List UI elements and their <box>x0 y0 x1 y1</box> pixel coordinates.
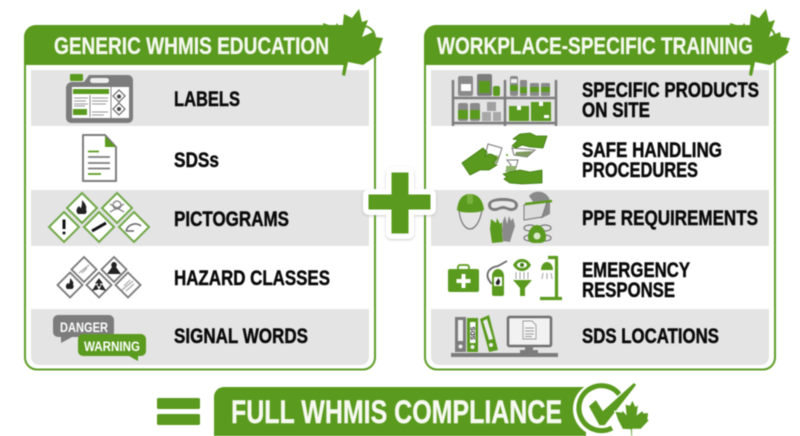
icon: emergency equipment <box>448 256 562 298</box>
label: specific products on site: ON SITE <box>582 99 650 122</box>
label: specific products on site <box>582 79 759 122</box>
icon: compliance check mark and maple leaf <box>573 382 653 436</box>
label: emergency response: EMERGENCY <box>582 259 690 282</box>
icon: green-bordered pictograms <box>49 193 149 242</box>
label: SDS locations: SDS LOCATIONS <box>582 325 719 348</box>
label: signal words: SIGNAL WORDS <box>174 325 308 348</box>
icon: stocked product shelves <box>452 74 557 126</box>
label: PPE requirements: PPE REQUIREMENTS <box>582 207 758 230</box>
icon: safety data sheet document <box>83 135 116 181</box>
label: specific products on site: SPECIFIC PRODUCTS <box>582 79 759 102</box>
icon: plus sign <box>369 173 430 233</box>
label: hazard classes: HAZARD CLASSES <box>174 267 330 290</box>
icon: danger and warning speech bubbles: WARNING <box>84 339 140 354</box>
icon: danger and warning speech bubbles: DANGER <box>60 320 108 335</box>
label: safe handling procedures <box>582 139 722 182</box>
label: labels: LABELS <box>174 88 240 111</box>
panel: generic WHMIS education <box>24 9 383 370</box>
icon: danger and warning speech bubbles <box>53 315 146 361</box>
label: SDSs: SDSs <box>174 149 219 172</box>
banner: full WHMIS compliance: FULL WHMIS COMPLIANCE <box>231 394 562 430</box>
panel: workplace-specific training <box>424 9 790 370</box>
icon: personal protective equipment <box>457 192 552 243</box>
heading: generic WHMIS education <box>24 9 383 76</box>
icon: SDS binders and computer monitor <box>451 315 558 357</box>
label: pictograms: PICTOGRAMS <box>174 208 289 231</box>
label: safe handling procedures: PROCEDURES <box>582 159 698 182</box>
label: safe handling procedures: SAFE HANDLING <box>582 139 722 162</box>
icon: labelled chemical jug <box>66 74 133 123</box>
label: emergency response <box>582 259 690 302</box>
icon: hazard class diamonds <box>58 257 140 298</box>
label: emergency response: RESPONSE <box>582 279 675 302</box>
banner: full WHMIS compliance <box>214 382 653 436</box>
heading: workplace-specific training <box>424 9 790 76</box>
icon: equals sign <box>157 398 200 425</box>
icon: SDS binders and computer monitor: SDS <box>470 326 477 340</box>
icon: gloved hands pouring chemical <box>462 133 547 184</box>
heading: generic WHMIS education: GENERIC WHMIS EDUCATION <box>54 33 329 60</box>
